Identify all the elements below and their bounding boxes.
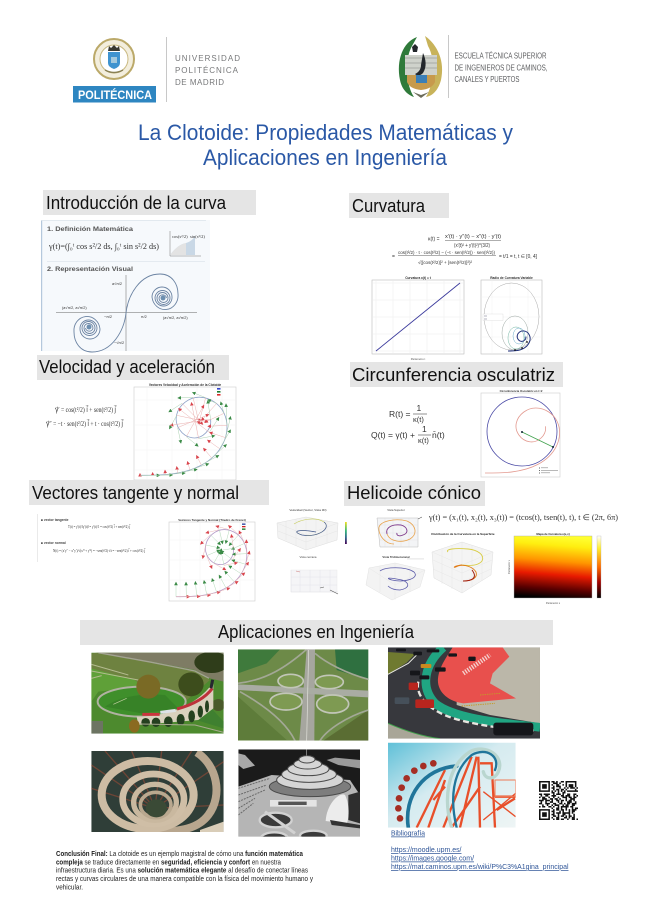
formula: curvature: = <box>392 254 395 260</box>
chart: 2D projection <box>291 570 338 594</box>
chart: double clothoid: a√π/2 <box>112 282 122 286</box>
logo: Universidad Politécnica de Madrid <box>73 37 240 102</box>
chart: double clothoid: −√π/2 <box>114 341 124 345</box>
bibliography: Bibliografía <box>391 828 426 838</box>
chart: top view <box>377 508 422 547</box>
figure: definition and clothoid plot <box>41 220 210 352</box>
subheading: representación: 2. Representación Visual <box>47 266 133 273</box>
red acceleration arrows <box>140 397 227 475</box>
heading: Velocidad y aceleración: Velocidad y aceleración <box>39 357 215 377</box>
formula: radius and centre: n̄(t) <box>432 430 445 440</box>
heading: Introducción de la curva: Introducción de la curva <box>46 193 227 213</box>
formula: radius and centre: R(t) = <box>389 409 411 419</box>
formula: radius and centre: κ(t) <box>413 415 424 424</box>
formula: gamma: γ(t)=(∫₀ᵗ cos s²/2 ds, ∫₀ᵗ sin s²/2 ds) <box>48 241 159 252</box>
conclusion text: infraestructura diaria. Es una solución matemática elegante al desafío de conectar líneas <box>56 868 308 874</box>
formula: curvature: κ(t) = <box>428 236 440 242</box>
chart title: Mapa de Curvatura κ(s,v) <box>536 532 570 536</box>
bibliography: https://mat.caminos.upm.es/wiki/P%C3%A1gina_principal <box>391 862 569 871</box>
photo: railway viaduct <box>91 652 229 734</box>
heading: Circunferencia osculatriz: Circunferencia osculatriz <box>352 365 555 385</box>
university name <box>175 54 240 87</box>
chart: heat map: Parámetro v <box>507 559 511 574</box>
title: La Clotoide: Propiedades Matemáticas y <box>138 120 513 145</box>
legend <box>539 468 558 474</box>
photo: cloverleaf interchange <box>238 649 368 741</box>
conclusion text: vehicular. <box>56 884 83 891</box>
chart: double clothoid: −π/2 <box>104 315 112 319</box>
legend <box>242 524 246 530</box>
bibliography: https://moodle.upm.es/ <box>391 845 462 854</box>
chart: Fresnel integrands: cos(s²/2) <box>172 234 188 239</box>
conclusion text: compleja se traduce directamente en seguridad, eficiencia y confort en nuestra <box>56 859 281 866</box>
chart title: Vista Superior <box>387 508 405 512</box>
formula: curvature: x′(t) · y″(t) − x″(t) · y′(t) <box>445 234 501 240</box>
panel: curvatura <box>349 193 542 361</box>
formula: radius and centre: Q(t) = γ(t) + <box>371 430 415 440</box>
title: Aplicaciones en Ingeniería <box>203 145 448 170</box>
formula: radius and centre <box>371 403 445 445</box>
formula: velocity and acceleration: γ⃗″ = −t · sen(t²/2) i⃗ + t · cos(t²/2) j⃗ <box>46 419 124 428</box>
photo: roller coaster <box>388 743 516 828</box>
chart: velocity norm 3D <box>277 508 338 559</box>
school name: ESCUELA TÉCNICA SUPERIOR <box>454 52 547 60</box>
QR code <box>539 782 578 819</box>
chart: 3D helix blue <box>366 555 425 600</box>
chart: heat map: Parámetro s <box>546 601 561 605</box>
chart title: Radio de Curvatura Variable <box>490 276 533 280</box>
chart: curvature versus parameter <box>372 276 464 361</box>
formula: velocity and acceleration: γ⃗′ = cos(t²/2) i⃗ + sen(t²/2) j⃗ <box>55 405 117 414</box>
heading: Aplicaciones en Ingeniería <box>80 620 553 645</box>
chart: Fresnel integrands <box>170 231 205 256</box>
subheading: definición: 1. Definición Matemática <box>47 226 134 233</box>
colorbar <box>597 536 601 598</box>
photo: racing circuit <box>388 647 540 739</box>
photo: spiral tower <box>91 751 224 832</box>
chart: velocity and acceleration vectors <box>134 383 236 480</box>
logo badge: POLITÉCNICA <box>73 86 156 102</box>
formula: radius and centre: κ(t) <box>418 436 429 445</box>
chart title: Vista Tridimensional <box>382 555 410 559</box>
bibliography: https://images.google.com/ <box>391 854 475 862</box>
logo: Escuela Técnica Superior <box>399 35 548 98</box>
heading: Aplicaciones en Ingeniería: Aplicaciones en Ingeniería <box>218 622 415 642</box>
university name: POLITÉCNICA <box>175 66 239 75</box>
formulas: tangent and normal: ■ vector tangente <box>41 518 69 522</box>
logo badge: POLITÉCNICA: POLITÉCNICA <box>78 89 152 102</box>
chart: osculating circle <box>481 389 560 477</box>
bibliography <box>391 828 569 871</box>
title <box>138 120 513 170</box>
green normal arrows <box>176 530 247 597</box>
red tangent arrows <box>176 525 250 597</box>
chart title: Vectores Velocidad y Aceleración de la Clotoide <box>149 383 221 387</box>
chart: double clothoid: (a√π/2, a√π/2) <box>163 316 188 320</box>
panel: vectores tangente y normal <box>29 480 338 601</box>
heading: Vectores tangente y normal: Vectores tangente y normal <box>32 483 239 503</box>
heading: Helicoide cónico: Helicoide cónico <box>347 483 481 503</box>
panel: helicoide cónico <box>344 481 618 605</box>
formula: curvature: √([cos(t²/2)]² + [sen(t²/2)]²)² <box>418 260 472 266</box>
formulas: tangent and normal: ■ vector normal <box>41 541 66 545</box>
formula: curvature: = t/1 = t, t ∈ [0, 4] <box>499 254 538 260</box>
panel: circunferencia osculatriz <box>350 362 563 477</box>
conclusion text <box>56 851 313 891</box>
formulas: tangent and normal <box>37 514 145 562</box>
heading: Curvatura <box>349 193 449 218</box>
icon: UPM seal <box>94 39 134 79</box>
conclusion text: rectas y curvas circulares de una manera compatible con la física del movimiento humano y <box>56 876 313 883</box>
formulas: tangent and normal: T(t) = γ′(t)/‖γ′(t)‖ = γ′(t)/1 = cos(t²/2) i⃗ + sen(t²/2) j⃗ <box>68 523 130 529</box>
chart: double clothoid <box>56 274 197 352</box>
chart: radius of curvature circles <box>481 276 542 354</box>
university name: DE MADRID <box>175 78 224 87</box>
legend <box>217 388 220 396</box>
heading: Curvatura: Curvatura <box>352 196 426 216</box>
chart: 3D helix curvature colours <box>431 532 495 593</box>
formula: curvature: cos(t²/2) · t · cos(t²/2) − (−t · sen(t²/2)) · sen(t²/2)) <box>398 250 495 256</box>
chart title: Curvatura κ(t) = t <box>405 276 432 280</box>
formula: curvature: (x′(t)² + y′(t)²)^(3/2) <box>454 243 490 249</box>
chart: tangent and normal vectors <box>169 518 255 601</box>
panel: introducción <box>41 190 256 352</box>
chart: curvature versus parameter: Parámetro t <box>411 357 426 361</box>
chart: Fresnel integrands: sin(s²/2) <box>190 234 205 239</box>
panel: velocidad y aceleración <box>37 355 236 480</box>
colorbar <box>345 522 347 544</box>
formula: radius and centre: 1 <box>416 403 422 413</box>
formula: curvature <box>392 234 538 266</box>
school name: CANALES Y PUERTOS <box>454 75 520 84</box>
icon: school emblem <box>399 36 442 98</box>
chart title: Velocidad (Vector, Vista 3D) <box>289 508 327 512</box>
legend <box>483 314 503 320</box>
green velocity arrows <box>140 392 231 475</box>
chart: double clothoid: π/2 <box>141 315 147 319</box>
chart title: Vectores Tangente y Normal (Triedro de Frenet) <box>178 518 246 522</box>
photo: stepped dome building <box>238 749 360 844</box>
chart: heat map <box>507 532 601 605</box>
school name <box>454 52 548 84</box>
chart title: Distribución de la Curvatura en la Superficie <box>431 532 495 536</box>
formula: conical helix: γ(t) = (x₁(t), x₂(t), x₃(t)) = (tcos(t), tsen(t), t), t ∈ (2π, 6π) <box>428 513 618 522</box>
formulas: tangent and normal: N(t) = (x′y″ − x″y′)/√(x′² + y′²) = −sen(t²/2)·t/t = −sen(t²/2) i⃗ + cos(t²/2) j⃗ <box>53 547 145 553</box>
panel: aplicaciones <box>80 620 578 871</box>
chart: velocity norm 3D: Vista cercana <box>300 555 317 559</box>
school name: DE INGENIEROS DE CAMINOS, <box>454 64 548 72</box>
university name: UNIVERSIDAD <box>175 54 240 63</box>
formula: velocity and acceleration <box>46 405 124 428</box>
chart: double clothoid: (a√π/2, a√π/2) <box>62 306 87 310</box>
formula: radius and centre: 1 <box>422 424 427 434</box>
conclusion text: Conclusión Final: La clotoide es un ejemplo magistral de cómo una función matemática <box>56 851 303 858</box>
chart title: Circunferencia Osculatriz en t=2 <box>500 389 543 393</box>
